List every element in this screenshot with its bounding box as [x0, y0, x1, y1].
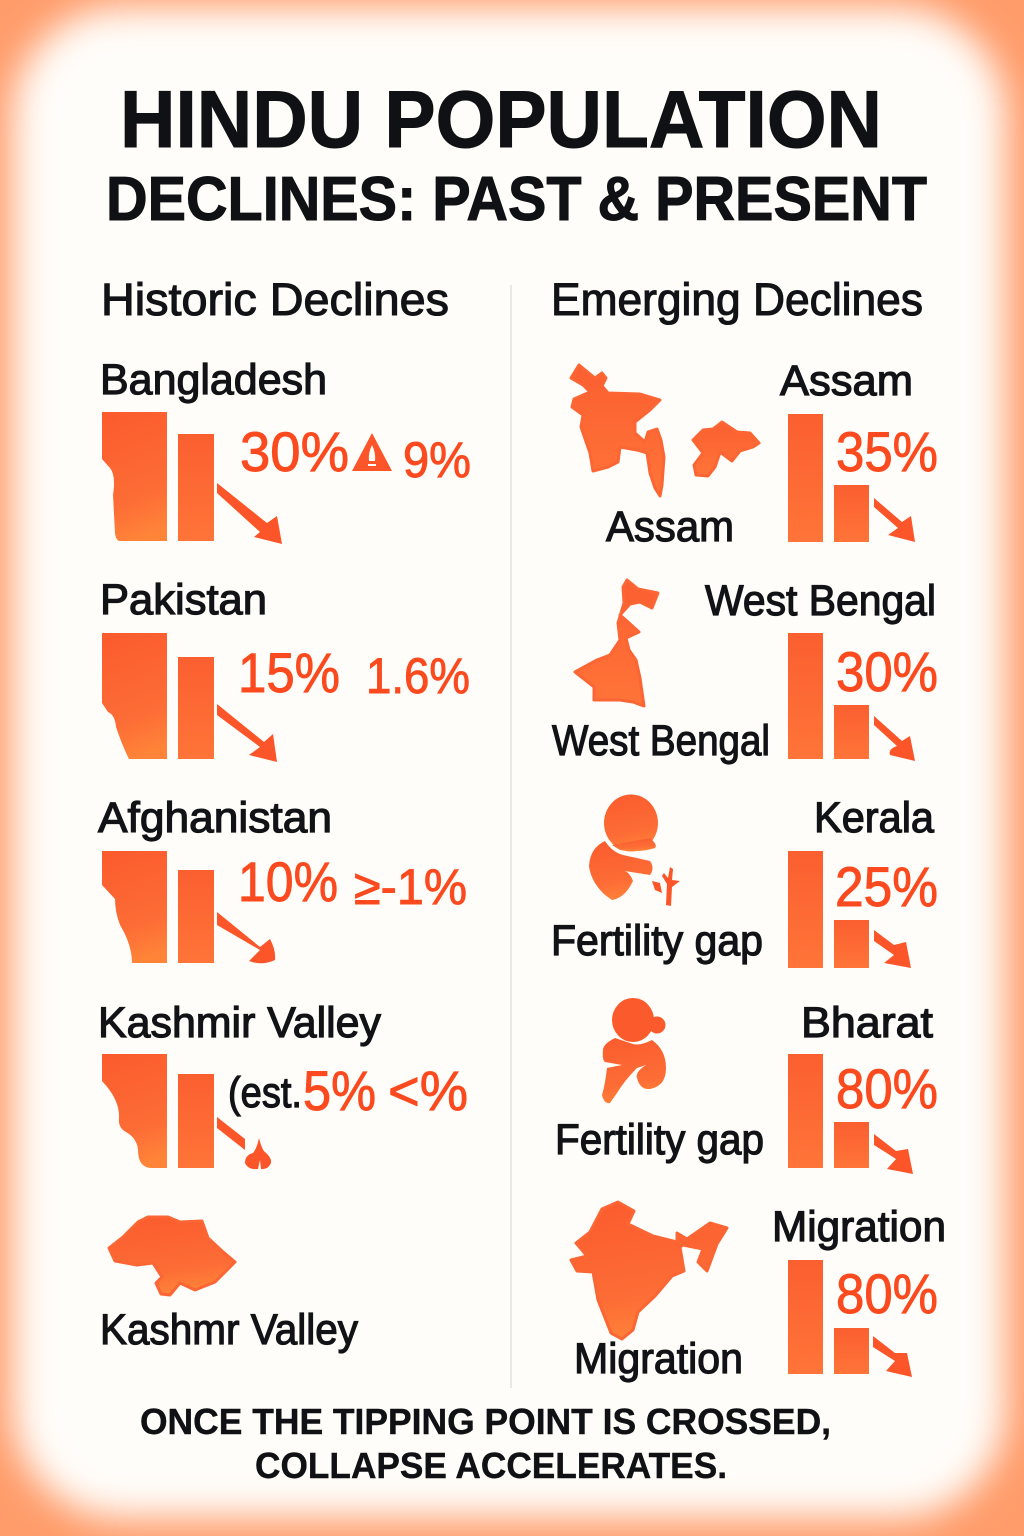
panel: historic declines — [98, 274, 471, 1354]
footer callout — [140, 1401, 831, 1486]
row: Kashmir Valley: (est. — [228, 1069, 302, 1117]
row: Bharat — [555, 998, 938, 1174]
row: Afghanistan: ≥-1% — [354, 859, 467, 915]
label: Kashmr Valley: Kashmr Valley — [100, 1306, 358, 1354]
row: Kerala: 25% — [835, 855, 938, 918]
row: Migration: Migration — [574, 1335, 743, 1383]
map: Kashmir Valley — [109, 1217, 235, 1295]
row: Pakistan — [100, 576, 470, 762]
row: Migration: Migration — [772, 1203, 946, 1251]
row: West Bengal — [552, 577, 938, 765]
row: Bangladesh: 30% — [240, 420, 349, 483]
row: Assam: Assam — [780, 357, 913, 405]
row: Afghanistan: 10% — [238, 850, 338, 913]
panel: emerging declines — [551, 274, 946, 1383]
row: Kashmir Valley: <% — [388, 1059, 468, 1122]
row: Bharat: Fertility gap — [555, 1116, 764, 1164]
row: Assam: 35% — [836, 420, 938, 483]
row: Bharat: Bharat — [801, 999, 933, 1047]
title: DECLINES: PAST & PRESENT — [106, 165, 927, 234]
row: West Bengal: West Bengal — [705, 577, 936, 625]
row: Kashmir Valley — [98, 999, 468, 1169]
row: Afghanistan — [98, 794, 467, 963]
row: Migration — [571, 1202, 946, 1383]
row: Bharat: 80% — [836, 1057, 938, 1120]
row: Bangladesh — [100, 356, 471, 544]
title: HINDU POPULATION — [120, 75, 882, 165]
row: Migration: 80% — [836, 1262, 938, 1325]
row: Bangladesh: 9% — [403, 432, 471, 488]
row: Pakistan: Pakistan — [100, 576, 267, 624]
row: Assam — [571, 357, 938, 551]
footer callout: COLLAPSE ACCELERATES. — [255, 1445, 727, 1486]
row: West Bengal: 30% — [836, 640, 938, 703]
row: West Bengal: West Bengal — [552, 717, 770, 765]
row: Kerala — [551, 794, 938, 968]
title — [106, 75, 927, 234]
row: Kerala: Kerala — [814, 794, 934, 842]
row: Assam: Assam — [606, 503, 734, 551]
row: Afghanistan: Afghanistan — [98, 794, 332, 842]
row: Kerala: Fertility gap — [551, 917, 763, 965]
row: Kashmir Valley: 5% — [303, 1059, 376, 1122]
row: Pakistan: 1.6% — [366, 648, 470, 704]
row: Kashmir Valley: Kashmir Valley — [98, 999, 381, 1047]
heading: emerging declines: Emerging Declines — [551, 274, 923, 325]
row: Pakistan: 15% — [238, 641, 340, 704]
footer callout: ONCE THE TIPPING POINT IS CROSSED, — [140, 1401, 831, 1442]
row: Bangladesh: Bangladesh — [100, 356, 327, 404]
heading: historic declines: Historic Declines — [101, 274, 449, 325]
